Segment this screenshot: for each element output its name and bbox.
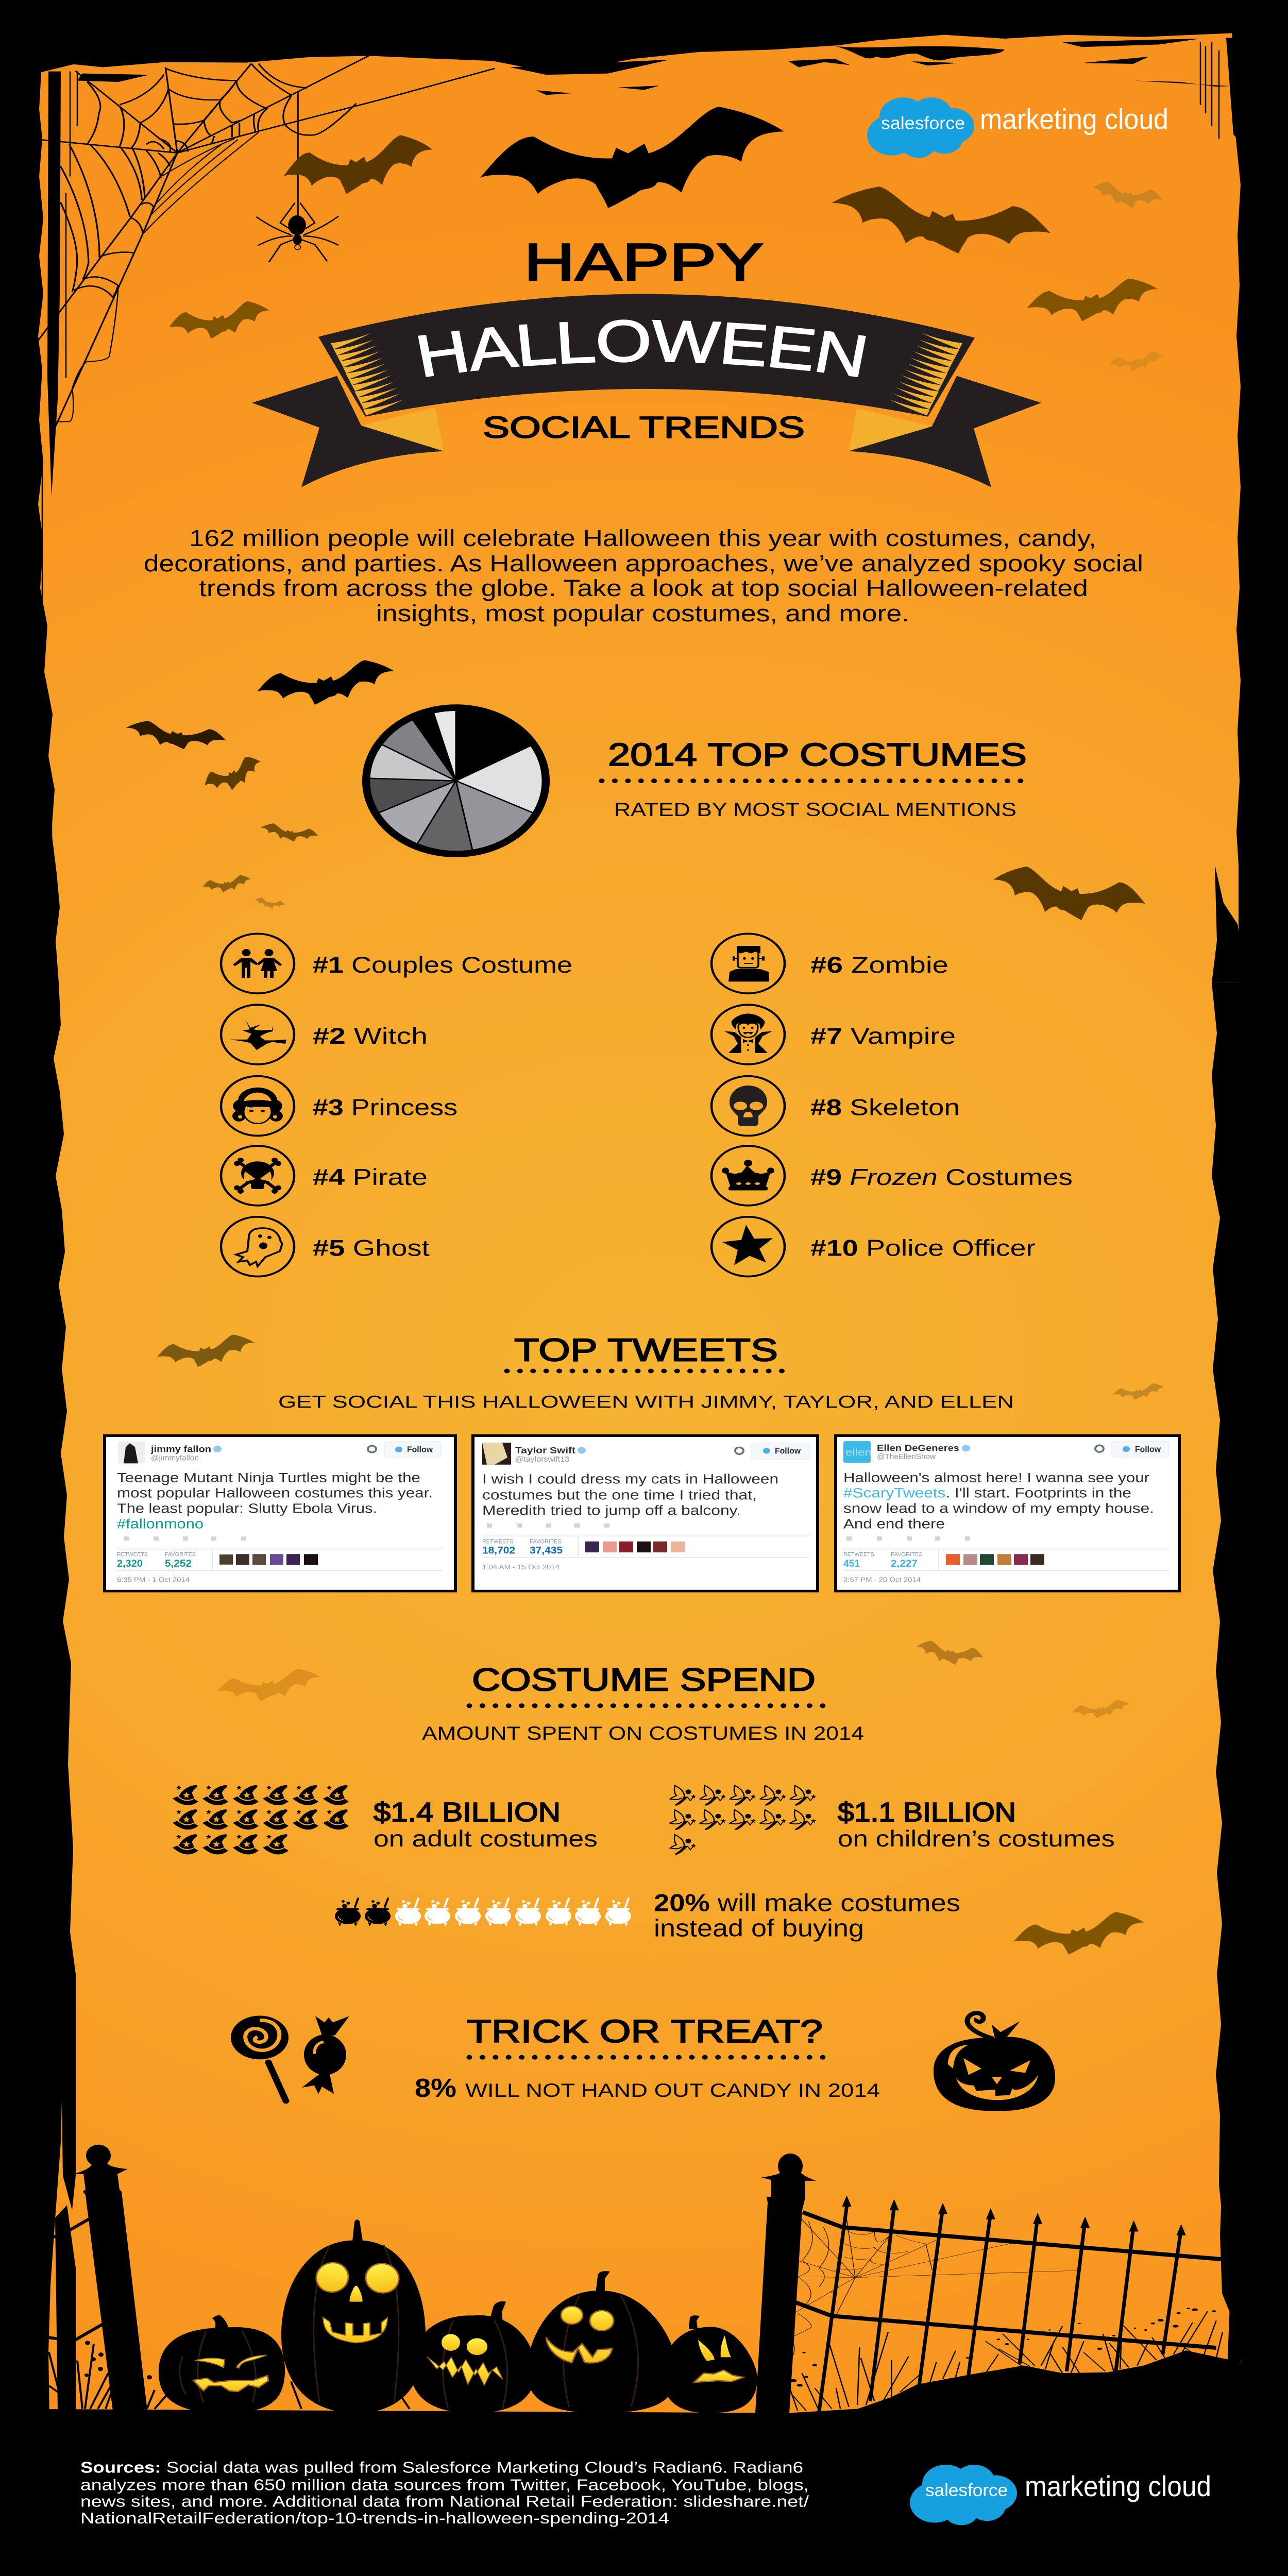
icon: hanging spider: [256, 91, 338, 262]
tweet card: taylor swift: 18,702: [482, 1545, 515, 1556]
costume item: zombie: #6 Zombie: [810, 952, 948, 978]
tweet card: taylor swift: Follow: [775, 1446, 801, 1455]
pumpkin 3: [410, 2301, 536, 2413]
tweet card: ellen degeneres: 451: [843, 1557, 860, 1569]
sources text: news sites, and more. Additional data from National Retail Federation: slideshare.net/: [80, 2493, 809, 2511]
tweet card: jimmy fallon: 6:35 PM - 1 Oct 2014: [117, 1577, 190, 1584]
costume item: frozen: #9 Frozen Costumes: [810, 1164, 1073, 1190]
heading: 2014 top costumes: 2014 TOP COSTUMES: [608, 737, 1027, 773]
costume item: ghost: #5 Ghost: [313, 1235, 430, 1261]
curve path for heading: [402, 361, 881, 380]
costume item: vampire: [711, 1005, 956, 1064]
bat: left of top tweets: [157, 1334, 254, 1367]
stat: children's costumes: $1.1 BILLION: [838, 1798, 1016, 1827]
tweet card: taylor swift: FAVORITES: [530, 1538, 562, 1545]
tweet card: jimmy fallon: 2,320: [117, 1557, 143, 1569]
ribbon band: [318, 294, 975, 417]
bat: tiny left: [255, 897, 285, 909]
heading: costume spend: AMOUNT SPENT ON COSTUMES IN 2014: [422, 1722, 864, 1744]
costume item: skeleton: [711, 1076, 960, 1136]
tweet card: taylor swift: Meredith tried to jump off a balcony.: [482, 1503, 741, 1518]
ground and hill: [0, 2350, 1288, 2576]
intro paragraph: 162 million people will celebrate Halloween this year with costumes, candy,: [189, 525, 1096, 551]
heading: trick or treat: [415, 2013, 880, 2103]
stat: make costumes: 20% will make costumes: [654, 1889, 960, 1917]
graveyard scene: [0, 2145, 1288, 2576]
avatar: ellen: [845, 1447, 872, 1458]
tweet card: jimmy fallon: most popular Halloween costumes this year.: [117, 1486, 433, 1501]
bat: medium left: [169, 301, 269, 338]
stat: children's costumes: on children’s costumes: [838, 1826, 1115, 1852]
costume item: princess: [221, 1076, 457, 1136]
tweet card: taylor swift: I wish I could dress my cats in Halloween: [482, 1472, 778, 1487]
icon: left gate post: [74, 2145, 147, 2411]
icons: adult witch hats: [173, 1785, 349, 1854]
tweet card: jimmy fallon: The least popular: Slutty Ebola Virus.: [117, 1501, 377, 1516]
bat: faint far right: [1072, 1700, 1130, 1718]
stripes right: [890, 333, 962, 415]
costume item: vampire: #7 Vampire: [810, 1023, 956, 1049]
costume item: police officer: #10 Police Officer: [810, 1235, 1036, 1261]
tweet card: jimmy fallon: @jimmyfallon: [151, 1454, 199, 1462]
tweet card: ellen degeneres: snow lead to a window of my empty house.: [843, 1501, 1154, 1516]
logo: salesforce marketing cloud bottom: salesforce: [925, 2481, 1008, 2500]
tweet card: jimmy fallon: [105, 1436, 455, 1591]
pumpkin 5: [662, 2315, 757, 2413]
logo: salesforce marketing cloud bottom: marketing cloud: [1025, 2471, 1211, 2503]
heading: costume spend: COSTUME SPEND: [472, 1662, 816, 1698]
tweet card: ellen degeneres: 2:57 PM - 20 Oct 2014: [843, 1577, 921, 1584]
costume item: frozen: [711, 1146, 1073, 1206]
bat: dark left: [126, 721, 226, 749]
stat: adult costumes: [374, 1798, 598, 1852]
tweet card: ellen degeneres: 2,227: [891, 1557, 918, 1569]
tweet card: jimmy fallon: FAVORITES: [165, 1551, 196, 1557]
costume item: zombie: [711, 934, 948, 993]
bat: faint right of top tweets: [1113, 1383, 1164, 1400]
ribbon tail left: [252, 376, 444, 487]
sources text: [80, 2459, 809, 2527]
tweet card: jimmy fallon: RETWEETS: [117, 1551, 148, 1557]
costume item: ghost: [221, 1217, 430, 1277]
logo: salesforce marketing cloud bottom: [910, 2465, 1211, 2525]
ribbon fold left: [361, 408, 444, 451]
tweet card: taylor swift: 37,435: [530, 1545, 563, 1556]
tweet card: jimmy fallon: Follow: [407, 1445, 433, 1454]
icon: frankenstein zombie: [711, 934, 785, 993]
pumpkin 1: [159, 2315, 285, 2413]
tweet card: ellen degeneres: FAVORITES: [891, 1551, 923, 1557]
ribbon tail right: [849, 376, 1041, 487]
bat: small left: [199, 754, 266, 794]
costume item: witch: [221, 1005, 428, 1064]
icon: wrapped candy: [302, 2016, 349, 2094]
bat: brown right of cauldrons: [1013, 1912, 1144, 1955]
spider web: [37, 52, 495, 429]
stat: adult costumes: $1.4 BILLION: [374, 1798, 561, 1827]
stripes left: [331, 333, 403, 415]
bat: faint top right: [1092, 182, 1162, 208]
icon: ghost: [221, 1217, 294, 1277]
tweet card: taylor swift: @taylorswift13: [515, 1455, 569, 1464]
subtitle: SOCIAL TRENDS: SOCIAL TRENDS: [483, 411, 805, 444]
heading: HALLOWEEN: HALLOWEEN: [418, 319, 866, 377]
tweet card: jimmy fallon: jimmy fallon: [150, 1444, 211, 1454]
icon: right gate post: [755, 2154, 816, 2413]
tweet card: taylor swift: RETWEETS: [482, 1538, 513, 1545]
bat: medium right: [1027, 279, 1158, 321]
stat: make costumes: [654, 1889, 960, 1942]
sources text: Sources: Social data was pulled from Salesforce Marketing Cloud’s Radian6. Radian6: [80, 2459, 803, 2477]
icon: lollipop: [231, 2015, 289, 2101]
heading: trick or treat: TRICK OR TREAT?: [467, 2013, 823, 2049]
tweet card: taylor swift: Taylor Swift: [515, 1446, 575, 1455]
bat: faint left of costume spend: [217, 1669, 320, 1701]
bat: brown right of costumes: [993, 867, 1146, 920]
tweet card: ellen degeneres: @TheEllenShow: [877, 1453, 936, 1461]
tweet card: jimmy fallon: 5,252: [165, 1557, 192, 1569]
icon: princess: [221, 1076, 294, 1136]
heading: top tweets: [278, 1332, 1014, 1412]
icon: vampire: [711, 1005, 785, 1064]
tweet card: ellen degeneres: And end there: [843, 1517, 945, 1532]
intro paragraph: decorations, and parties. As Halloween approaches, we’ve analyzed spooky social: [144, 550, 1143, 577]
icon: star: [711, 1217, 785, 1277]
icons: cauldrons 20 percent: [335, 1899, 631, 1926]
heading: costume spend: [422, 1662, 864, 1744]
sources text: analyzes more than 650 million data sources from Twitter, Facebook, YouTube, blogs,: [80, 2477, 809, 2494]
bat: faint right: [1109, 351, 1164, 371]
banner ribbon: [252, 294, 1041, 487]
tweet card: ellen degeneres: Follow: [1135, 1444, 1161, 1454]
left grass and spatter: [49, 2342, 410, 2409]
tweet card: ellen degeneres: RETWEETS: [843, 1551, 874, 1557]
tweet card: ellen degeneres: [836, 1436, 1179, 1591]
pumpkin 4: [527, 2271, 677, 2413]
bat: small left 2: [261, 823, 318, 841]
heading: 2014 top costumes: [602, 737, 1033, 820]
stat: make costumes: instead of buying: [654, 1914, 864, 1942]
heading: trick or treat: 8%: [415, 2073, 456, 2103]
tweet card: ellen degeneres: Ellen DeGeneres: [877, 1444, 959, 1453]
icon: small spider web on fence: [791, 2219, 1077, 2358]
avatar: [482, 1443, 511, 1465]
left streaks: [47, 72, 61, 496]
tweet card: jimmy fallon: Teenage Mutant Ninja Turtles might be the: [117, 1471, 420, 1485]
logo: salesforce marketing cloud top: salesforce: [881, 113, 965, 133]
costume item: pirate: #4 Pirate: [313, 1164, 428, 1190]
costume item: princess: #3 Princess: [313, 1094, 457, 1120]
tweet card: taylor swift: 1:04 AM - 15 Oct 2014: [482, 1564, 560, 1571]
stat: adult costumes: on adult costumes: [374, 1826, 598, 1852]
tweet card: taylor swift: costumes but the one time I tried that,: [482, 1488, 757, 1503]
avatar: [118, 1442, 145, 1463]
ribbon fold right: [849, 408, 932, 451]
stat: children's costumes: [838, 1798, 1115, 1852]
bat: brown top right: [832, 187, 1050, 253]
icon: iron fence: [794, 2195, 1227, 2413]
costume item: witch: #2 Witch: [313, 1023, 428, 1049]
logo: salesforce marketing cloud top: marketing cloud: [980, 104, 1168, 135]
bat: brown near web: [283, 135, 433, 194]
intro paragraph: [144, 525, 1143, 626]
icons: children fairies: [670, 1786, 816, 1855]
icon: couple: [221, 934, 294, 993]
icon: jack-o-lantern: [934, 2013, 1055, 2111]
bat: faint above costume spend right: [917, 1640, 984, 1665]
costume item: police officer: [711, 1217, 1036, 1277]
heading: top tweets: GET SOCIAL THIS HALLOWEEN WITH JIMMY, TAYLOR, AND ELLEN: [278, 1392, 1014, 1412]
logo: salesforce marketing cloud top: [867, 97, 1168, 158]
heading: trick or treat: WILL NOT HAND OUT CANDY IN 2014: [465, 2079, 880, 2101]
sources text: NationalRetailFederation/top-10-trends-in-halloween-spending-2014: [80, 2510, 669, 2527]
costume item: pirate: [221, 1146, 428, 1206]
costume item: couples: [221, 934, 572, 993]
pumpkin 2 tall: [281, 2219, 426, 2413]
icon: skull and crossbones: [221, 1146, 294, 1206]
tweet card: taylor swift: [473, 1436, 818, 1591]
costume item: couples: #1 Couples Costume: [313, 952, 572, 978]
costume item: skeleton: #8 Skeleton: [810, 1094, 960, 1120]
icon: skull: [711, 1076, 785, 1136]
tweet card: ellen degeneres: #ScaryTweets. I'll start. Footprints in the: [843, 1486, 1131, 1501]
intro paragraph: insights, most popular costumes, and more.: [376, 600, 909, 626]
tweet card: ellen degeneres: Halloween's almost here! I wanna see your: [843, 1471, 1149, 1485]
intro paragraph: trends from across the globe. Take a look at top social Halloween-related: [199, 575, 1088, 601]
left fence rails: [46, 2219, 103, 2340]
heading: 2014 top costumes: RATED BY MOST SOCIAL MENTIONS: [614, 799, 1016, 820]
icon: witch on broom: [221, 1005, 294, 1064]
bat: large black top: [480, 107, 784, 208]
avatar: [843, 1441, 872, 1463]
tweet card: jimmy fallon: #fallonmono: [117, 1517, 204, 1532]
pie chart: top costumes: [366, 707, 546, 854]
grass and spatter: [789, 2308, 1223, 2411]
icon: crown: [711, 1146, 785, 1206]
title: HAPPY: HAPPY: [524, 233, 764, 292]
bat: small left 3: [202, 875, 251, 892]
heading: top tweets: TOP TWEETS: [514, 1332, 778, 1368]
bat: black above pie: [257, 660, 394, 705]
